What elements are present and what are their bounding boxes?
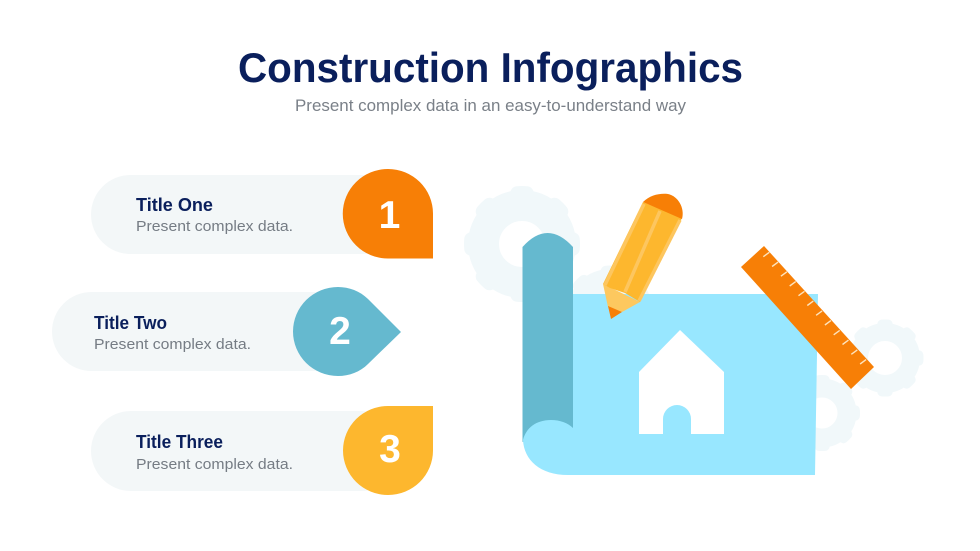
title: Construction Infographics [238, 44, 743, 91]
drop one [343, 169, 433, 258]
gear right [851, 324, 919, 392]
blueprint sheet [523, 294, 818, 475]
gear lower right [788, 380, 856, 446]
pencil stripes [605, 204, 680, 301]
icon: house [639, 330, 724, 434]
heading two: Title Two [94, 312, 167, 333]
number one: 1 [379, 194, 400, 237]
illustration: blueprint [471, 193, 919, 475]
pencil tip [608, 306, 622, 319]
heading one: Title One [136, 194, 213, 215]
icon: ruler [741, 246, 874, 389]
number two: 2 [329, 310, 351, 353]
pencil cap [643, 194, 683, 219]
drop two [293, 287, 401, 376]
ruler body [741, 246, 874, 389]
pill three [91, 411, 401, 491]
number three: 3 [379, 428, 401, 471]
panel: item two [52, 287, 401, 376]
description three: Present complex data. [136, 456, 293, 473]
subtitle: Present complex data in an easy-to-understand way [295, 96, 686, 115]
drop three [343, 406, 433, 495]
pill one [91, 175, 401, 254]
ruler ticks [763, 252, 866, 364]
heading three: Title Three [136, 431, 223, 452]
pencil wood [603, 284, 640, 312]
gear behind pencil [569, 271, 651, 353]
panel: item three [91, 406, 433, 495]
pencil body [603, 202, 682, 302]
description one: Present complex data. [136, 218, 293, 235]
paper roll [522, 233, 573, 442]
gear top left [471, 193, 573, 295]
description two: Present complex data. [94, 336, 251, 353]
icon: pencil [603, 194, 683, 319]
panel: item one [91, 169, 433, 258]
pill two [52, 292, 352, 371]
